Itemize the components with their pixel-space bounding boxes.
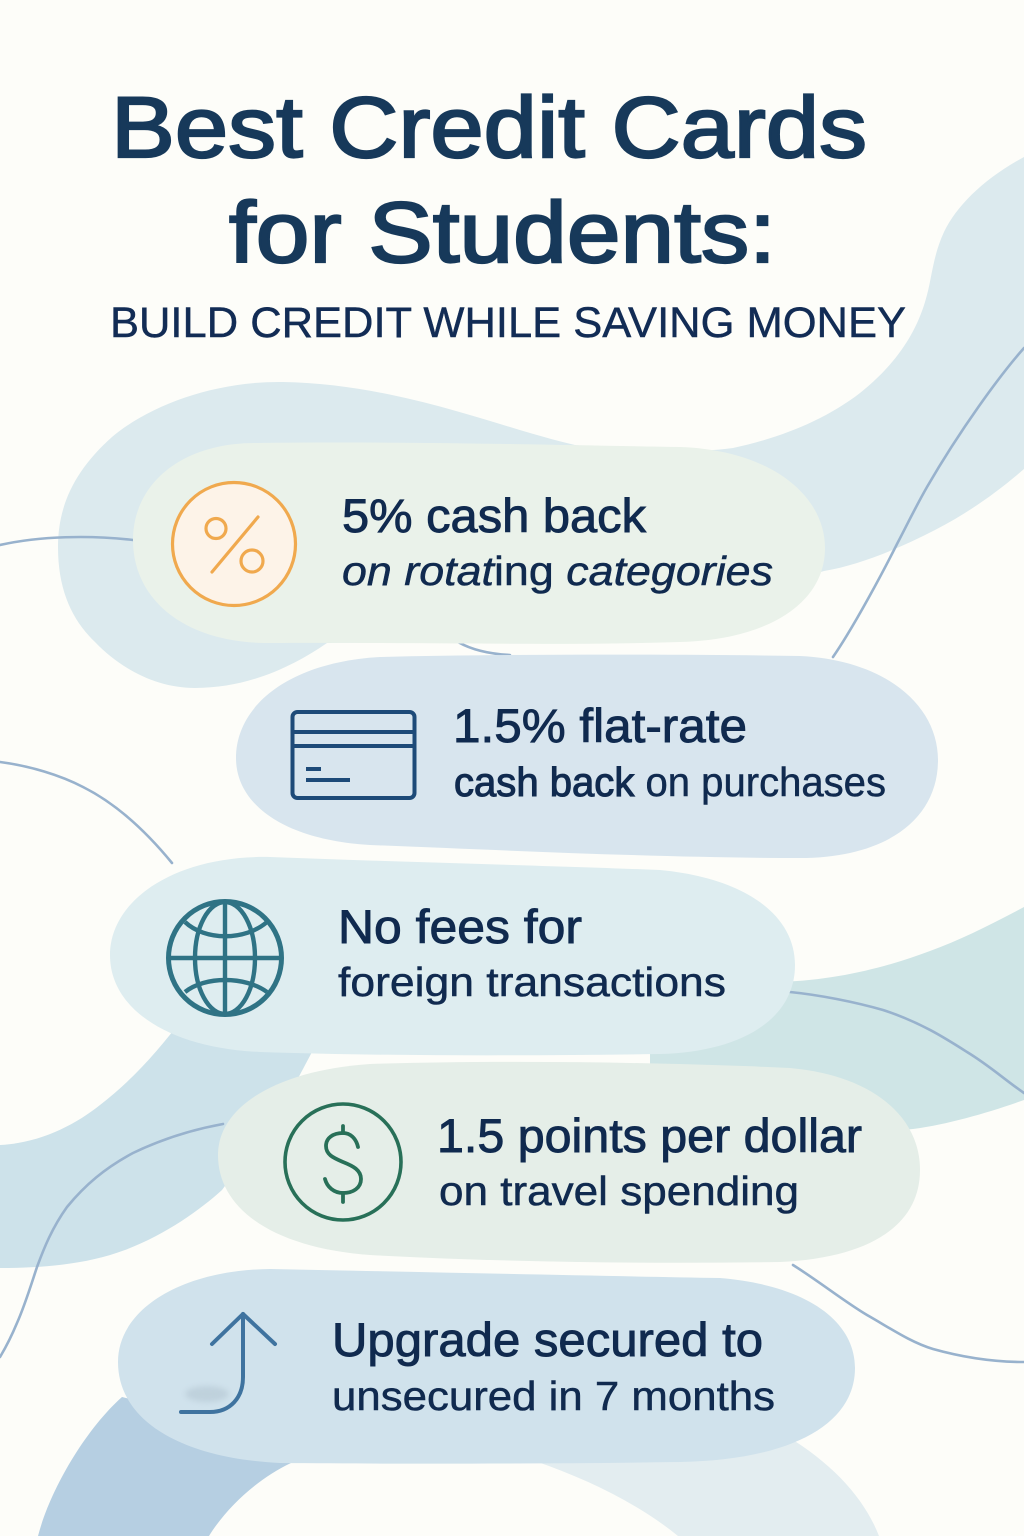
icon: dollar xyxy=(285,1104,401,1220)
icon: upward arrow xyxy=(181,1314,275,1412)
connector line: upper right xyxy=(833,348,1024,657)
connector line: between first pills xyxy=(458,642,510,655)
background blob: bottom left band xyxy=(38,1397,300,1536)
background blob: upper swoosh xyxy=(58,157,1024,688)
text: No fees for: No fees for xyxy=(338,900,582,953)
subtitle: BUILD CREDIT WHILE SAVING MONEY xyxy=(110,299,906,347)
connector line: left of third pill xyxy=(0,762,172,863)
text: unsecured in 7 months: unsecured in 7 months xyxy=(332,1373,775,1419)
icon: globe xyxy=(168,902,282,1014)
icon: percent xyxy=(172,482,296,606)
text: foreign transactions: foreign transactions xyxy=(338,959,726,1005)
icon: smudge xyxy=(185,1386,229,1402)
panel: 5% cash back xyxy=(133,442,825,644)
title: Best Credit Cards xyxy=(111,80,867,176)
panel: upgrade secured xyxy=(118,1269,855,1464)
panel: points per dollar xyxy=(218,1062,920,1263)
text: Upgrade secured to: Upgrade secured to xyxy=(332,1313,763,1366)
connector line: left of first pill xyxy=(0,537,133,545)
text: 5% cash back: 5% cash back xyxy=(342,489,647,542)
text: 1.5% flat-rate: 1.5% flat-rate xyxy=(453,699,747,752)
panel: no foreign fees xyxy=(110,857,795,1055)
background blob: right swoosh xyxy=(650,907,1024,1140)
connector line: left of fourth pill xyxy=(0,1124,223,1357)
background blob: bottom right band xyxy=(535,1435,879,1536)
text: cash back on purchases: cash back on purchases xyxy=(454,759,886,805)
text: on travel spending: on travel spending xyxy=(439,1168,799,1214)
connector line: right of fourth pill xyxy=(793,1265,1024,1362)
connector line: right of third pill xyxy=(790,992,1024,1093)
text: on rotating categories: on rotat ing categories xyxy=(342,548,773,594)
icon: credit card xyxy=(292,712,414,798)
title: for Students: xyxy=(229,185,776,281)
title xyxy=(111,80,867,281)
background blob: left lower swoosh xyxy=(0,1015,312,1268)
panel: 1.5% flat-rate xyxy=(236,655,938,858)
text: 1.5 points per dollar: 1.5 points per dollar xyxy=(437,1109,862,1162)
